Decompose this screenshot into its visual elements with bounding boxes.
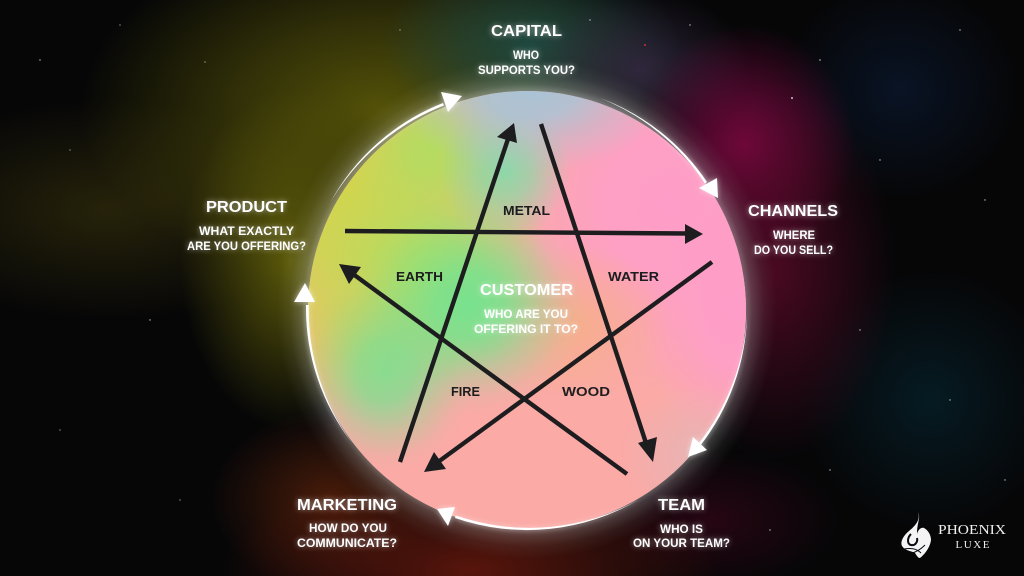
arrowhead: channels (699, 178, 718, 198)
logo: phoenix luxe (901, 512, 1006, 558)
element labels: EARTH (396, 269, 443, 284)
label: capital (478, 23, 575, 77)
centre: customer: CUSTOMER (480, 282, 573, 299)
arrowhead 5 (339, 264, 361, 284)
label: product: WHAT EXACTLY (199, 226, 294, 238)
label: team: ON YOUR TEAM? (633, 538, 730, 550)
label: channels (748, 203, 838, 257)
label: capital: WHO (513, 50, 539, 62)
element labels: WATER (608, 269, 660, 284)
arc: marketing to product (306, 305, 352, 443)
arrow: product to channels (345, 231, 688, 234)
arrow: channels to marketing (438, 262, 712, 462)
pentagram circle (284, 68, 770, 552)
arc: capital to channels (600, 98, 707, 184)
element labels (396, 203, 660, 399)
arrow: marketing to capital (400, 139, 508, 462)
arrowhead: marketing (437, 507, 455, 526)
label: channels: CHANNELS (748, 203, 838, 220)
label: capital: SUPPORTS YOU? (478, 65, 575, 77)
label: channels: DO YOU SELL? (754, 245, 833, 257)
label: marketing: HOW DO YOU (309, 523, 387, 535)
white cycle arcs and arrowheads (294, 92, 747, 530)
arrowhead 1 (497, 123, 517, 143)
label: product (187, 199, 306, 253)
element labels: WOOD (562, 384, 610, 399)
label: team (633, 497, 730, 550)
centre: customer (474, 282, 578, 336)
element labels: FIRE (451, 384, 480, 399)
label: team: TEAM (658, 497, 705, 514)
logo: phoenix luxe: LUXE (956, 539, 990, 551)
label: marketing: MARKETING (297, 497, 397, 514)
arc: product to capital (330, 103, 444, 203)
logo: phoenix luxe: PHOENIX (938, 523, 1006, 538)
label: marketing (297, 497, 397, 550)
label: product: ARE YOU OFFERING? (187, 241, 306, 253)
label: marketing: COMMUNICATE? (297, 538, 397, 550)
arrow: team to product (353, 274, 627, 474)
arc: channels to team (698, 315, 747, 446)
arrowhead 3 (685, 224, 703, 244)
label: capital: CAPITAL (491, 23, 562, 40)
arrowhead 2 (638, 437, 657, 462)
centre: customer: WHO ARE YOU (484, 309, 568, 321)
arrowhead: team (688, 437, 707, 457)
element labels: METAL (503, 203, 550, 218)
centre: customer: OFFERING IT TO? (474, 324, 578, 336)
label: product: PRODUCT (206, 199, 287, 216)
arrowhead 4 (424, 452, 446, 472)
label: channels: WHERE (773, 230, 815, 242)
label: team: WHO IS (660, 524, 703, 536)
arrow: capital to team (541, 124, 647, 446)
arrowhead: capital (441, 92, 462, 112)
arc: team to marketing (455, 499, 640, 530)
arrowhead: product (294, 283, 315, 302)
icon: phoenix flame (901, 512, 931, 558)
star arrows (339, 123, 712, 474)
